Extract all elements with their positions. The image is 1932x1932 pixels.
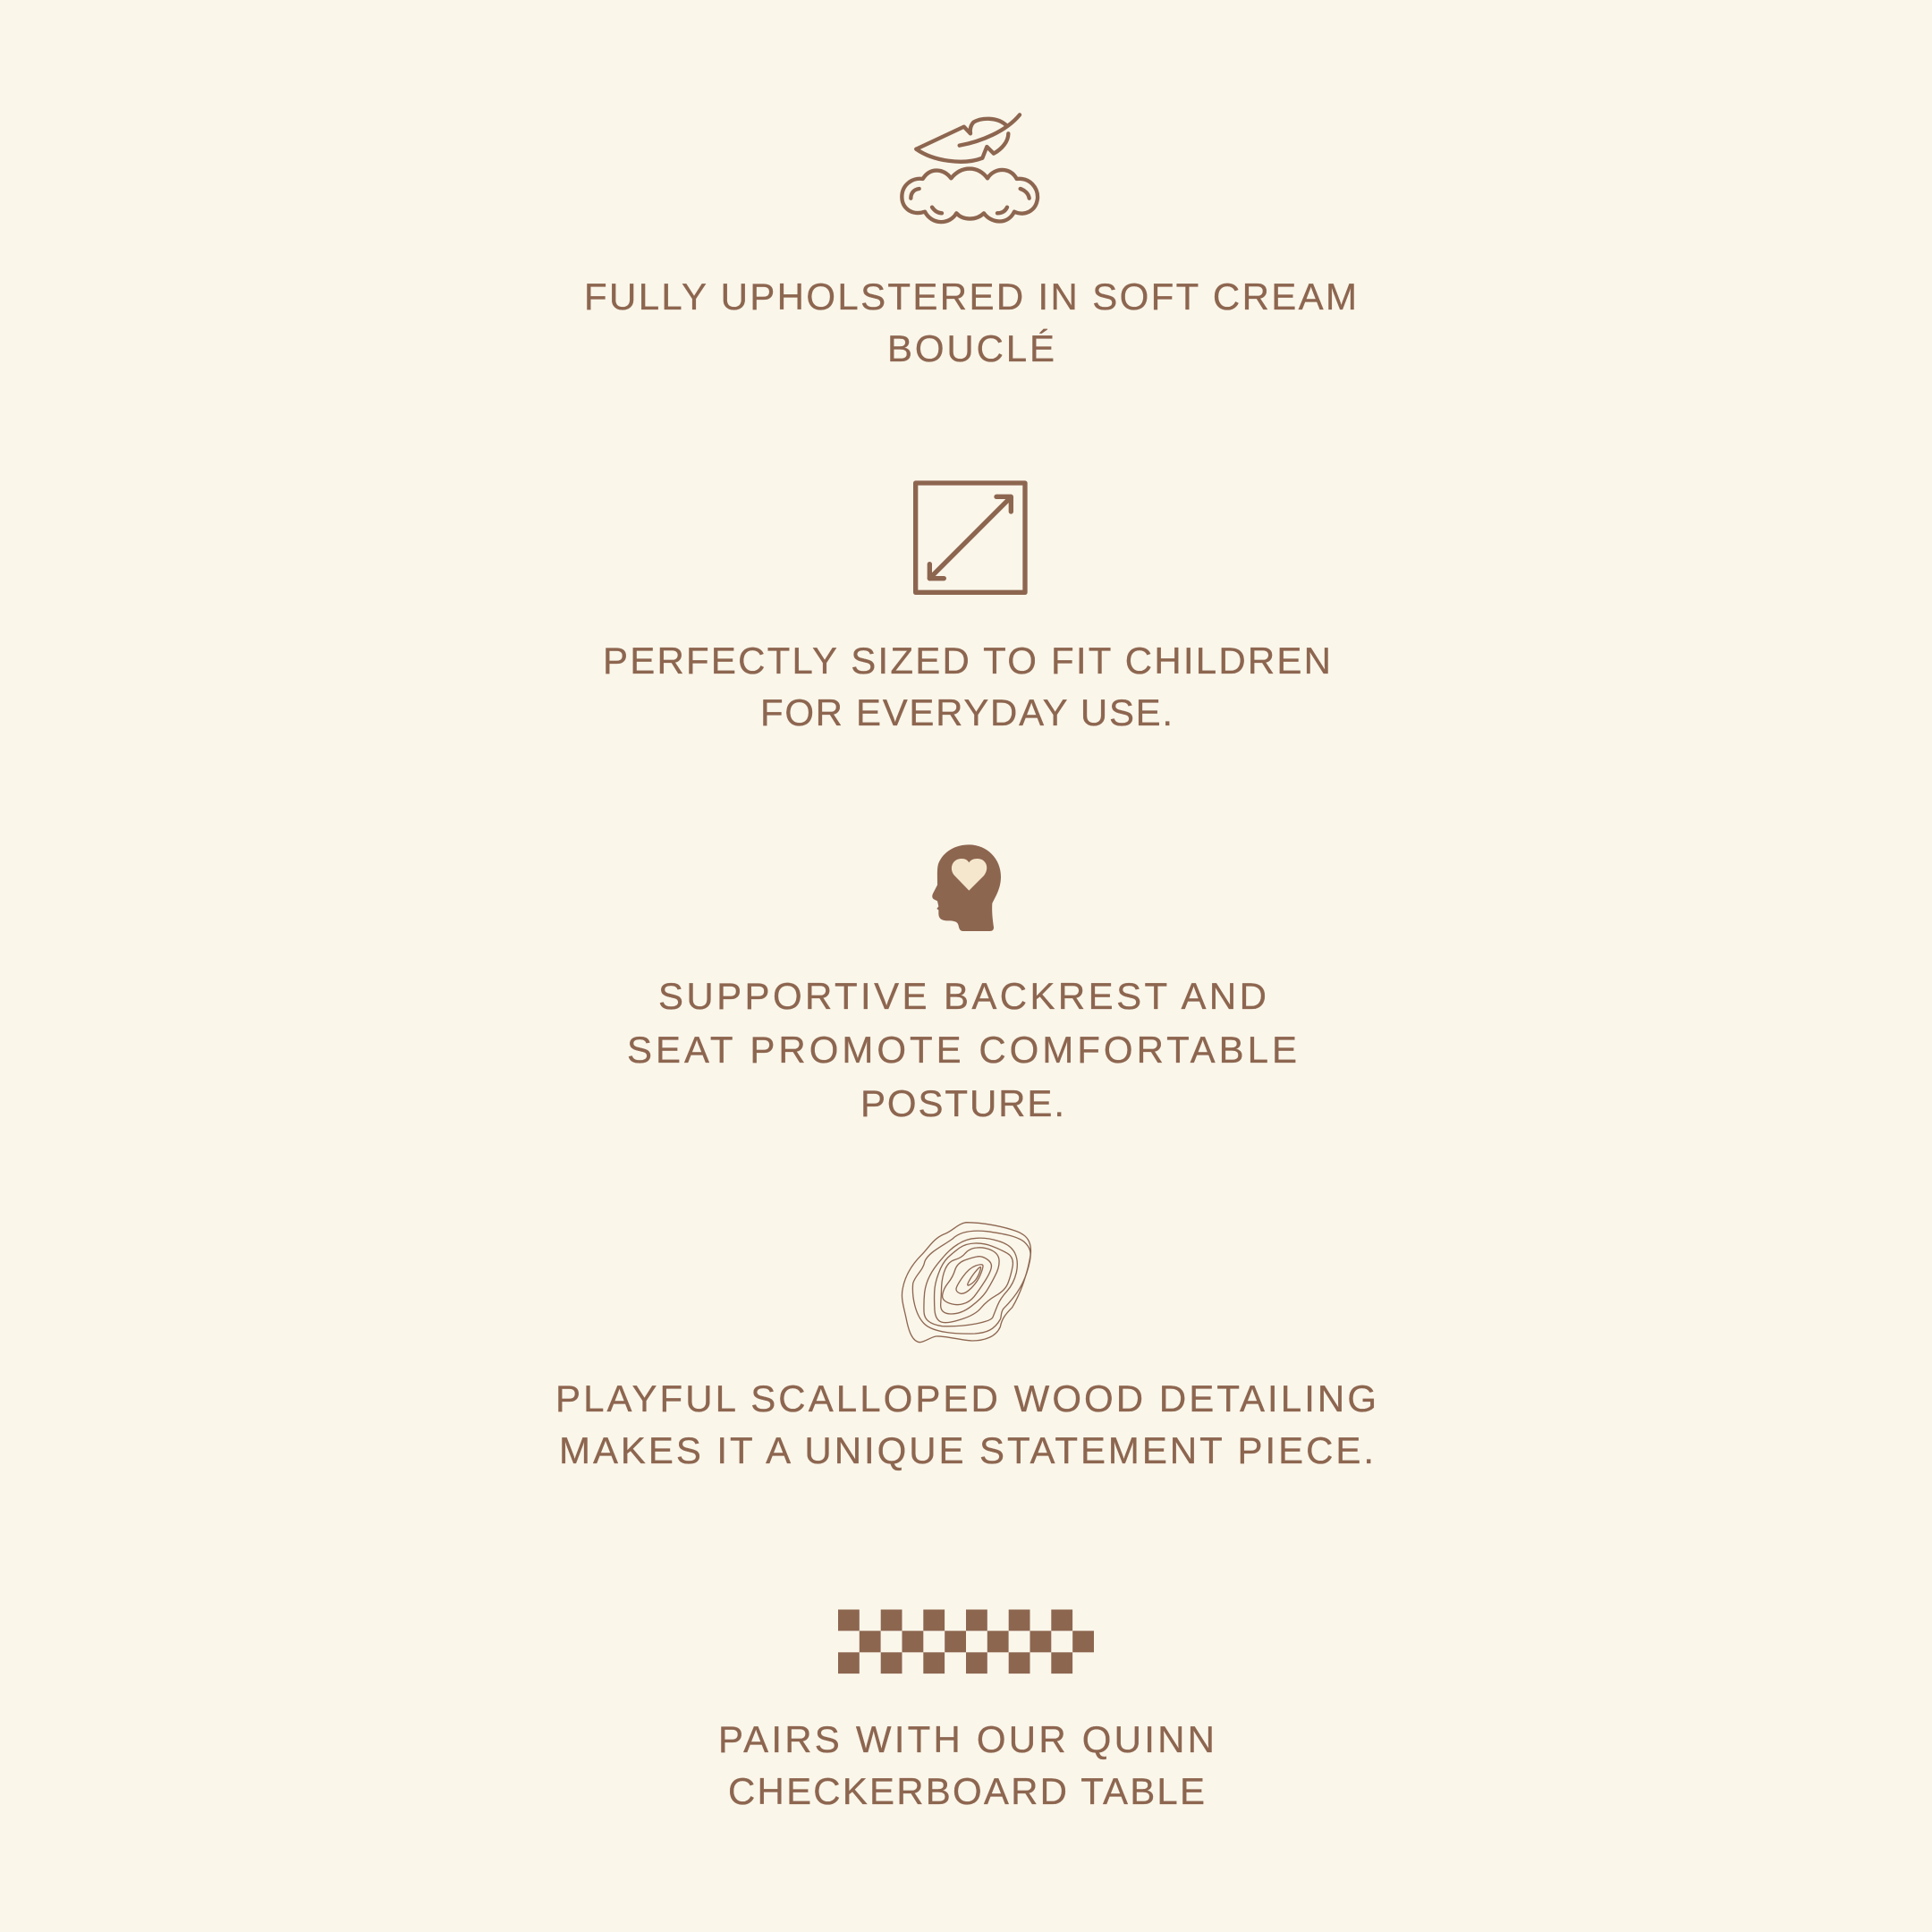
text: supportive backrest: [627, 975, 1297, 1124]
text: supportive backrest: SEAT PROMOTE COMFORTABLE: [627, 1029, 1297, 1071]
text: fully upholstered: BOUCLÉ: [887, 327, 1055, 369]
icon: feather over cloud: [902, 114, 1038, 222]
text: pairs with quinn table: CHECKERBOARD TABLE: [728, 1770, 1205, 1812]
text: pairs with quinn table: [718, 1718, 1215, 1812]
text: perfectly sized: [603, 640, 1331, 733]
text: playful scalloped: [555, 1377, 1377, 1471]
text: playful scalloped: MAKES IT A UNIQUE STATEMENT PIECE.: [559, 1429, 1374, 1471]
icon: checkerboard strip: [838, 1610, 1094, 1674]
text: supportive backrest: SUPPORTIVE BACKREST AND: [658, 975, 1267, 1017]
text: fully upholstered: FULLY UPHOLSTERED IN SOFT CREAM: [584, 275, 1357, 318]
icon: wood grain rings: [902, 1223, 1030, 1343]
text: fully upholstered: [584, 275, 1357, 369]
text: supportive backrest: POSTURE.: [860, 1082, 1064, 1124]
text: perfectly sized: PERFECTLY SIZED TO FIT CHILDREN: [603, 640, 1331, 682]
icon: square with diagonal arrow: [916, 483, 1025, 592]
text: perfectly sized: FOR EVERYDAY USE.: [760, 691, 1173, 733]
icon: head with heart: [932, 844, 1001, 931]
text: pairs with quinn table: PAIRS WITH OUR QUINN: [718, 1718, 1215, 1760]
text: playful scalloped: PLAYFUL SCALLOPED WOOD DETAILING: [555, 1377, 1377, 1419]
